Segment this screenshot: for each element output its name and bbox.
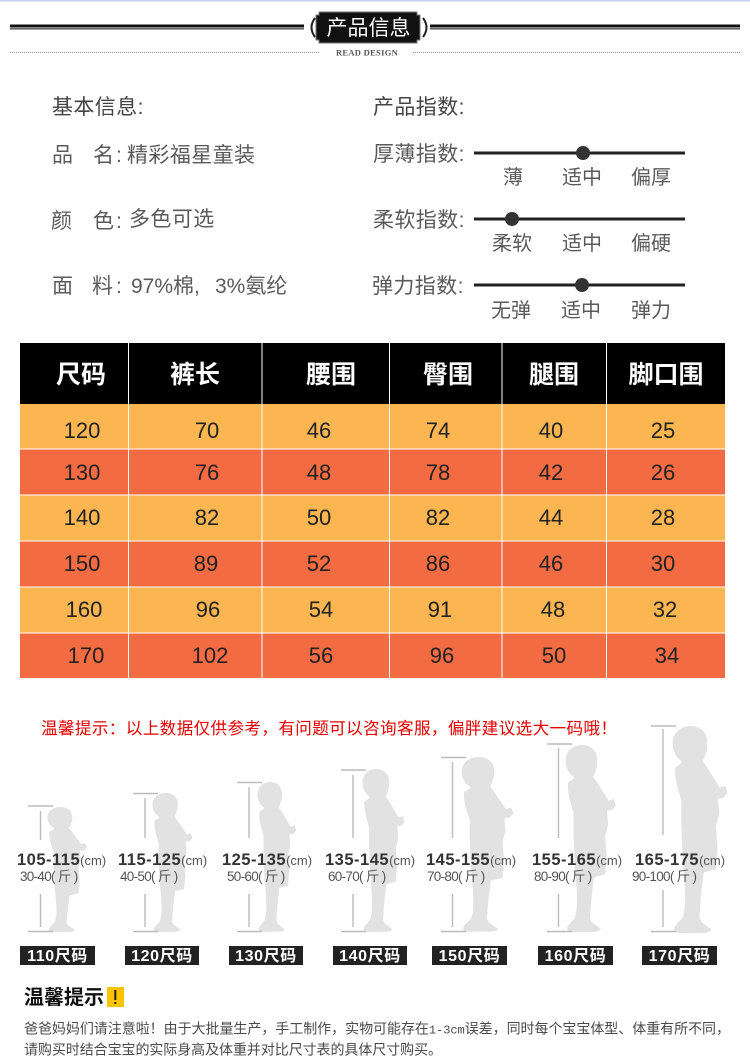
elasticity slider (372, 275, 685, 322)
figure 150: 150尺码 (439, 947, 500, 965)
figure 150: 70-80( 斤 ) (427, 869, 485, 884)
figure 110 (17, 806, 106, 965)
panel: basic information: 多色可选 (129, 208, 215, 231)
figure 120: 115-125(cm) (118, 851, 207, 869)
panel: product indexes: 产品指数: (373, 96, 465, 119)
table header row: 臀围 (423, 361, 473, 389)
tips heading: 温馨提示 (24, 986, 104, 1009)
row 140: 44 (539, 505, 563, 530)
thickness slider: 厚薄指数: (373, 143, 465, 166)
elasticity slider: 弹力指数: (372, 275, 464, 298)
row 160: 91 (428, 597, 452, 622)
row 140: 140 (64, 505, 100, 530)
row 160: 54 (309, 597, 333, 622)
figure 110: 105-115(cm) (17, 851, 106, 869)
row 130: 26 (651, 460, 675, 485)
softness slider: 偏硬 (631, 232, 671, 255)
row 130: 76 (195, 460, 219, 485)
elasticity slider: 无弹 (491, 299, 531, 322)
panel: basic information: 3%氨纶 (215, 275, 287, 298)
panel: basic information: 面 (52, 275, 73, 298)
panel: basic information: 色 (93, 210, 114, 233)
panel: basic information: 颜 (51, 210, 72, 233)
size guide figures (17, 726, 728, 965)
row 130: 130 (64, 460, 100, 485)
row 160: 96 (196, 597, 220, 622)
figure 170: 170尺码 (649, 947, 710, 965)
row 170: 56 (309, 643, 333, 668)
panel: basic information: 基本信息: (52, 96, 144, 119)
row 120: 25 (651, 418, 675, 443)
row 170 (20, 633, 725, 678)
row 150: 30 (651, 551, 675, 576)
figure 170: 90-100( 斤 ) (632, 869, 697, 884)
row 150: 86 (426, 551, 450, 576)
row 130: 42 (539, 460, 563, 485)
thickness slider: 偏厚 (631, 166, 671, 189)
figure 120 (118, 793, 207, 965)
row 150: 52 (307, 551, 331, 576)
panel: basic information: 品 (52, 144, 73, 167)
row 120: 70 (195, 418, 219, 443)
panel: basic information: : (116, 275, 122, 298)
row 150: 150 (64, 551, 100, 576)
row 170: 50 (542, 643, 566, 668)
row 150 (20, 541, 725, 587)
row 150: 46 (539, 551, 563, 576)
tips body text (24, 1020, 730, 1058)
row 170: 96 (430, 643, 454, 668)
row 160 (20, 587, 725, 633)
softness slider: 柔软 (492, 232, 532, 255)
red notice: 温馨提示：以上数据仅供参考，有问题可以咨询客服，偏胖建议选大一码哦！ (41, 719, 617, 738)
softness slider: 柔软指数: (373, 209, 465, 232)
figure 160: 155-165(cm) (532, 851, 622, 869)
row 160: 32 (653, 597, 677, 622)
row 140: 82 (195, 505, 219, 530)
figure 130: 130尺码 (235, 947, 297, 965)
table header row: 裤长 (170, 361, 220, 389)
row 140: 50 (307, 505, 331, 530)
row 120: 74 (426, 418, 450, 443)
tips body text: 爸爸妈妈们请注意啦！由于大批量生产，手工制作，实物可能存在1-3cm误差，同时每个宝宝体型、体重有所不同， (24, 1020, 730, 1038)
table header row (20, 343, 725, 404)
panel: product indexes (372, 96, 685, 322)
figure 130: 125-135(cm) (222, 851, 312, 869)
row 170: 34 (655, 643, 679, 668)
figure 170: 165-175(cm) (635, 851, 725, 869)
table header row: 脚口围 (628, 361, 704, 389)
row 120: 46 (307, 418, 331, 443)
table header row: 尺码 (56, 361, 106, 389)
row 150: 89 (194, 551, 218, 576)
figure 150 (426, 757, 516, 965)
heading banner: product info: 产品信息 (326, 17, 410, 40)
panel: basic information: 料 (92, 275, 113, 298)
table header row: 腰围 (306, 361, 356, 389)
table header row: 腿围 (529, 361, 579, 389)
figure 130: 50-60( 斤 ) (227, 869, 285, 884)
figure 140: 140尺码 (339, 947, 401, 965)
row 130: 48 (307, 460, 331, 485)
row 170: 170 (68, 643, 104, 668)
heading banner: product info: READ DESIGN (336, 48, 399, 58)
figure 160 (532, 744, 622, 965)
heading banner: product info (10, 12, 740, 58)
figure 170 (632, 726, 728, 965)
figure 120: 120尺码 (131, 947, 193, 965)
tips body text: 请购买时结合宝宝的实际身高及体重并对比尺寸表的具体尺寸购买。 (24, 1042, 442, 1058)
figure 140: 135-145(cm) (325, 851, 415, 869)
thickness slider: 薄 (503, 166, 523, 189)
figure 130 (222, 782, 312, 965)
row 120 (20, 404, 725, 449)
row 140: 82 (426, 505, 450, 530)
figure 160: 160尺码 (545, 947, 606, 965)
size table (20, 343, 725, 678)
figure 150: 145-155(cm) (426, 851, 516, 869)
row 130 (20, 449, 725, 495)
row 120: 120 (64, 418, 100, 443)
row 130: 78 (426, 460, 450, 485)
thickness slider: 适中 (562, 166, 602, 189)
panel: basic information: 名 (93, 144, 114, 167)
figure 110: 110尺码 (27, 947, 88, 965)
elasticity slider: 弹力 (631, 299, 671, 322)
panel: basic information: , (194, 275, 200, 298)
panel: basic information: : (116, 144, 122, 167)
row 120: 40 (539, 418, 563, 443)
row 160: 48 (541, 597, 565, 622)
thickness slider (373, 143, 685, 189)
figure 140 (325, 769, 415, 965)
row 160: 160 (66, 597, 102, 622)
panel: basic information: 精彩福星童装 (127, 144, 255, 167)
softness slider (373, 209, 685, 255)
row 140: 28 (651, 505, 675, 530)
elasticity slider: 适中 (561, 299, 601, 322)
figure 110: 30-40( 斤 ) (20, 869, 78, 884)
panel: basic information: 97%棉 (131, 275, 194, 298)
icon: exclamation (107, 987, 124, 1007)
panel: basic information: : (116, 210, 122, 233)
panel: basic information (51, 96, 287, 298)
figure 120: 40-50( 斤 ) (120, 869, 178, 884)
row 170: 102 (192, 643, 228, 668)
figure 140: 60-70( 斤 ) (328, 869, 386, 884)
row 140 (20, 495, 725, 541)
softness slider: 适中 (562, 232, 602, 255)
figure 160: 80-90( 斤 ) (534, 869, 592, 884)
